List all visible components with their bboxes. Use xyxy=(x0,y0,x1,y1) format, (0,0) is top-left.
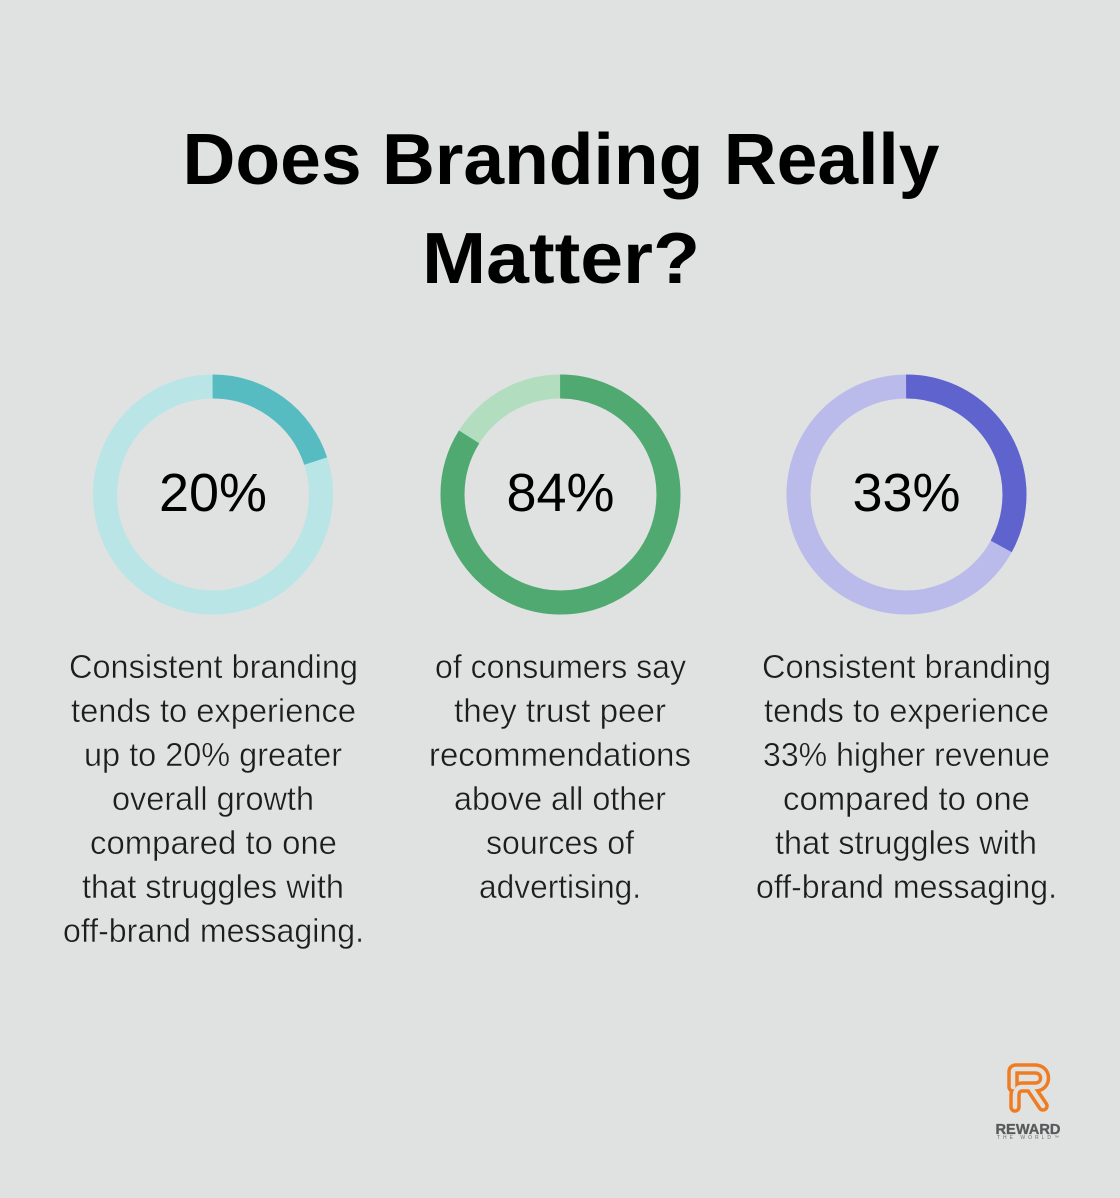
description: 20% growth: that struggles with xyxy=(82,868,344,905)
description: 84% trust: above all other xyxy=(454,780,666,817)
description: 20% growth: up to 20% greater xyxy=(84,736,342,773)
title: Matter? xyxy=(422,219,700,299)
description: 20% growth: tends to experience xyxy=(71,692,356,729)
panel: 20% growth xyxy=(63,386,364,949)
stat: 20%: 20% xyxy=(159,463,267,523)
stat: 84%: 84% xyxy=(506,463,614,523)
description: 20% growth: compared to one xyxy=(90,824,337,861)
description: 20% growth xyxy=(63,648,364,949)
description: 84% trust xyxy=(429,648,691,905)
icon: orange R mark xyxy=(1013,1069,1044,1107)
donut chart: 84% xyxy=(452,386,668,602)
logo tagline: THE WORLD™ xyxy=(997,1135,1059,1141)
description: 20% growth: off-brand messaging. xyxy=(63,912,364,949)
description: 33% revenue: off-brand messaging. xyxy=(756,868,1057,905)
logo wordmark: REWARD xyxy=(996,1121,1061,1138)
description: 33% revenue xyxy=(756,648,1057,905)
donut chart: 33% xyxy=(798,386,1014,602)
description: 84% trust: sources of xyxy=(486,824,635,861)
panel: 84% trust xyxy=(429,386,691,905)
description: 84% trust: of consumers say xyxy=(435,648,686,685)
description: 33% revenue: compared to one xyxy=(783,780,1030,817)
description: 84% trust: they trust peer xyxy=(454,692,666,729)
stat: 33%: 33% xyxy=(852,463,960,523)
title: Does Branding Really xyxy=(182,120,940,200)
description: 84% trust: recommendations xyxy=(429,736,691,773)
description: 20% growth: Consistent branding xyxy=(69,648,358,685)
logo: Reward the World xyxy=(996,1069,1061,1141)
panel: 33% revenue xyxy=(756,386,1057,905)
description: 84% trust: advertising. xyxy=(479,868,641,905)
description: 20% growth: overall growth xyxy=(112,780,314,817)
title xyxy=(182,120,940,299)
description: 33% revenue: 33% higher revenue xyxy=(763,736,1050,773)
description: 33% revenue: that struggles with xyxy=(775,824,1037,861)
description: 33% revenue: tends to experience xyxy=(764,692,1049,729)
donut chart: 20% xyxy=(105,386,321,602)
description: 33% revenue: Consistent branding xyxy=(762,648,1051,685)
